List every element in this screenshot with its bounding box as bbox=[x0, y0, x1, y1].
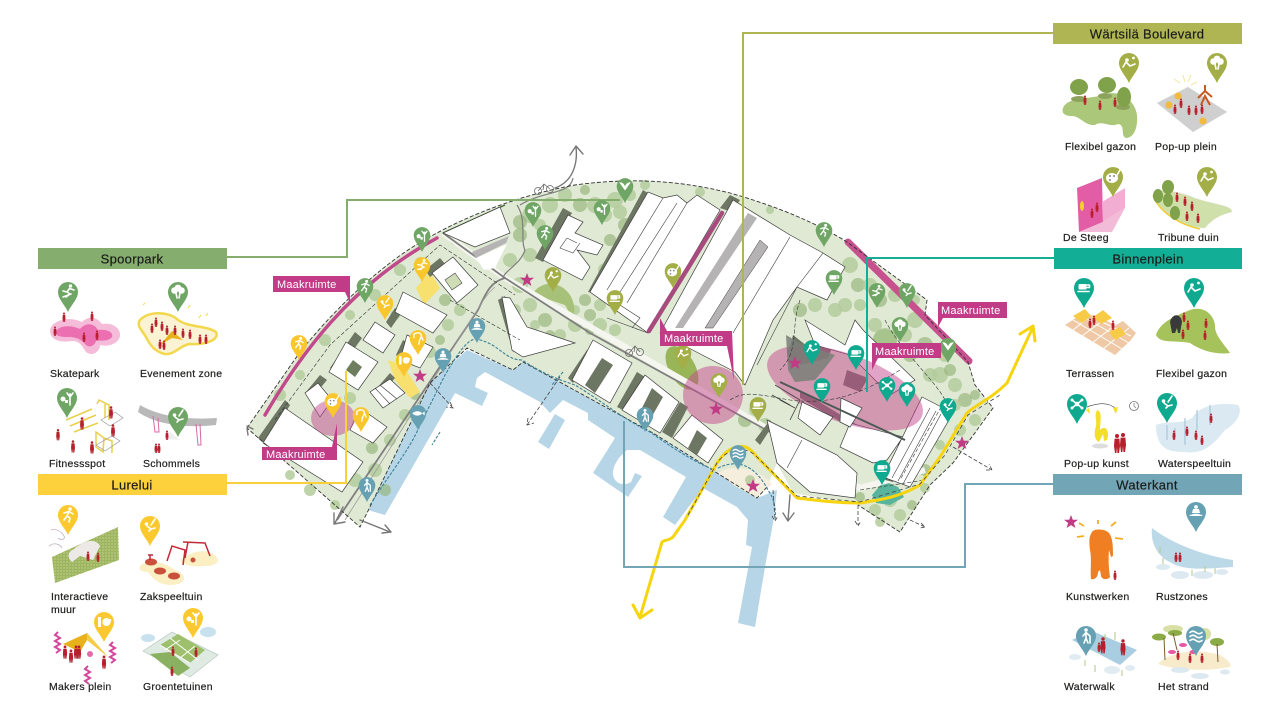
tree canopy bbox=[274, 180, 981, 527]
dashed inner paths bbox=[275, 245, 945, 490]
item: Skatepark bbox=[50, 282, 120, 380]
heading: Wärtsilä Boulevard bbox=[1053, 23, 1242, 44]
heading: Wärtsilä Boulevard: Wärtsilä Boulevard bbox=[1090, 26, 1204, 42]
callout: Maakruimte boulevard: Maakruimte bbox=[664, 333, 723, 345]
item: Interactieve muur: muur bbox=[51, 604, 76, 616]
beach bbox=[718, 468, 772, 498]
item: Het strand bbox=[1152, 625, 1231, 693]
item: Waterspeeltuin bbox=[1156, 393, 1240, 470]
item: Terrassen: Terrassen bbox=[1066, 368, 1114, 380]
item: Tribune duin bbox=[1153, 167, 1232, 244]
item: Rustzones: Rustzones bbox=[1156, 591, 1208, 603]
panel: Spoorpark bbox=[38, 248, 227, 470]
item: Groentetuinen: Groentetuinen bbox=[143, 681, 213, 693]
item: Zakspeeltuin: Zakspeeltuin bbox=[140, 591, 203, 603]
item: Tribune duin: Tribune duin bbox=[1158, 232, 1219, 244]
building shadows bbox=[258, 190, 925, 482]
map pins: Waterkant bbox=[359, 318, 746, 502]
panel: Binnenplein bbox=[1054, 248, 1242, 470]
heading: Lurelui bbox=[38, 474, 227, 495]
green site ground bbox=[247, 181, 993, 532]
item: Pop-up plein: Pop-up plein bbox=[1155, 141, 1217, 153]
grey arrows bbox=[247, 146, 794, 533]
item: Flexibel gazon bbox=[1156, 278, 1230, 380]
item: Waterspeeltuin: Waterspeeltuin bbox=[1158, 458, 1231, 470]
map pins: Wärtsilä Boulevard bbox=[545, 263, 766, 422]
panel: Wärtsilä Boulevard bbox=[1053, 23, 1242, 244]
item: Terrassen bbox=[1065, 278, 1136, 380]
item: Interactieve muur bbox=[49, 505, 119, 616]
heading: Lurelui: Lurelui bbox=[111, 478, 153, 492]
item: Waterwalk: Waterwalk bbox=[1064, 681, 1115, 693]
item: Flexibel gazon: Flexibel gazon bbox=[1065, 141, 1136, 153]
item: Makers plein: Makers plein bbox=[49, 681, 112, 693]
panel: Lurelui bbox=[38, 474, 227, 693]
item: Het strand: Het strand bbox=[1158, 681, 1209, 693]
item: Fitnessspot bbox=[49, 388, 123, 470]
item: Pop-up kunst: Pop-up kunst bbox=[1064, 458, 1129, 470]
flow arrows bbox=[430, 377, 992, 528]
item: Groentetuinen bbox=[141, 608, 218, 693]
plaza buildings and courtyards bbox=[772, 335, 905, 440]
water: harbour bbox=[368, 350, 777, 627]
stars bbox=[413, 273, 969, 492]
item: Fitnessspot: Fitnessspot bbox=[49, 458, 105, 470]
waterfront dashed route bbox=[370, 339, 775, 520]
callout: Maakruimte west bbox=[273, 276, 350, 303]
lawn: olive mounds bbox=[388, 272, 904, 505]
map pins: Lurelui bbox=[291, 257, 430, 432]
maakruimte strips bbox=[265, 213, 969, 415]
callout: Maakruimte binnenplein: Maakruimte bbox=[875, 346, 934, 358]
callout: Maakruimte south-west bbox=[262, 423, 337, 461]
item: Interactieve muur: Interactieve bbox=[51, 591, 108, 603]
item: Makers plein bbox=[49, 612, 115, 693]
icon: bicycle bbox=[534, 184, 644, 356]
item: Rustzones bbox=[1152, 502, 1233, 603]
panel: Waterkant bbox=[1053, 474, 1242, 693]
item: Zakspeeltuin bbox=[139, 516, 218, 603]
maakruimte zones bbox=[311, 328, 934, 448]
callout: Maakruimte east bbox=[938, 302, 1007, 327]
heading: Spoorpark: Spoorpark bbox=[101, 252, 164, 266]
callout: Maakruimte west: Maakruimte bbox=[277, 279, 336, 291]
callout: Maakruimte binnenplein bbox=[872, 343, 941, 370]
item: Schommels: Schommels bbox=[143, 458, 200, 470]
item: Waterwalk bbox=[1064, 626, 1137, 693]
item: Kunstwerken: Kunstwerken bbox=[1066, 591, 1129, 603]
item: Skatepark: Skatepark bbox=[50, 368, 100, 380]
map pins: Spoorpark bbox=[357, 178, 956, 363]
item: De Steeg: De Steeg bbox=[1063, 232, 1109, 244]
item: Kunstwerken bbox=[1064, 515, 1129, 603]
dashed site boundary bbox=[247, 181, 993, 532]
heading: Waterkant bbox=[1053, 474, 1242, 495]
item: Flexibel gazon bbox=[1063, 53, 1139, 153]
callout: Maakruimte east: Maakruimte bbox=[941, 305, 1000, 317]
road network bbox=[337, 178, 925, 520]
connector lines bbox=[227, 33, 1054, 567]
map pins: Binnenplein bbox=[804, 340, 956, 485]
heading: Binnenplein: Binnenplein bbox=[1112, 252, 1184, 266]
heading: Binnenplein bbox=[1054, 248, 1242, 269]
item: De Steeg bbox=[1063, 167, 1125, 244]
item: Flexibel gazon: Flexibel gazon bbox=[1156, 368, 1227, 380]
callout: Maakruimte boulevard bbox=[660, 318, 734, 380]
callout: Maakruimte south-west: Maakruimte bbox=[266, 449, 325, 461]
yellow route arrow bbox=[633, 326, 1035, 618]
heading: Waterkant: Waterkant bbox=[1116, 478, 1178, 492]
item: Pop-up plein bbox=[1155, 53, 1227, 153]
item: Evenement zone: Evenement zone bbox=[140, 368, 222, 380]
site plan map bbox=[227, 33, 1054, 627]
item: Pop-up kunst bbox=[1064, 394, 1138, 470]
buildings bbox=[263, 192, 953, 498]
item: Schommels bbox=[138, 405, 217, 470]
item: Evenement zone bbox=[139, 282, 222, 380]
heading: Spoorpark bbox=[38, 248, 227, 269]
